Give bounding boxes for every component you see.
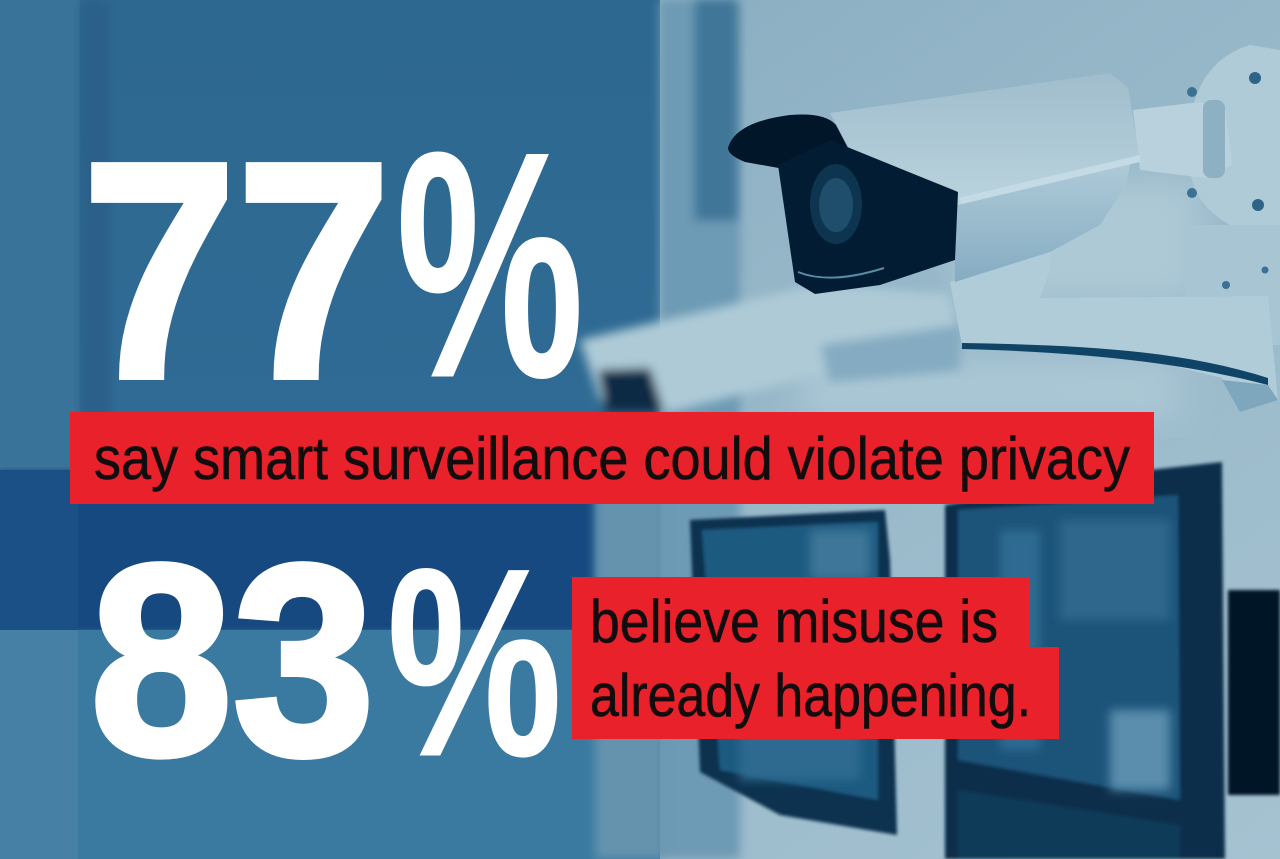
- wall mount plate: [1190, 45, 1280, 230]
- callout: privacy: [70, 412, 1154, 504]
- callout: privacy: say smart surveillance could violate privacy: [94, 425, 1130, 492]
- arm: [950, 252, 1278, 412]
- blurred monitors: [690, 462, 1280, 859]
- callout: misuse: believe misuse is: [590, 588, 998, 655]
- callout: misuse: already happening.: [590, 662, 1031, 729]
- icon: security camera: [728, 45, 1280, 412]
- stat: 77%: %: [396, 86, 584, 445]
- callout: misuse: [572, 577, 1059, 739]
- neck: [1133, 102, 1232, 178]
- upper body: [830, 73, 1140, 205]
- stat: 77%: 77: [82, 99, 391, 443]
- stat: 83%: 83: [90, 508, 375, 812]
- hood: [728, 114, 848, 170]
- stat: 83%: [90, 508, 562, 812]
- blurred rear camera: [580, 284, 960, 412]
- lens housing: [778, 140, 958, 294]
- lower body: [955, 155, 1132, 282]
- stat: 83%: %: [387, 512, 562, 812]
- stat: 77%: [82, 86, 584, 445]
